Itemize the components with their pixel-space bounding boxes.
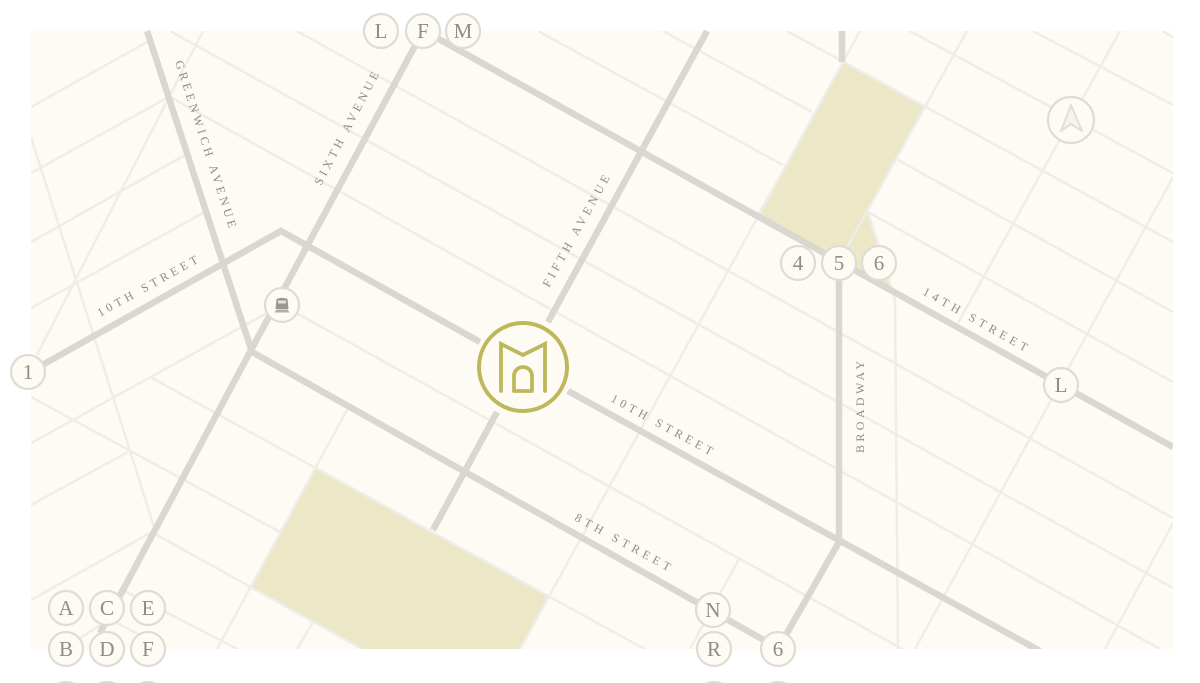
subway badge 5: 5 bbox=[834, 251, 844, 275]
street label: 10th Street west: 10TH STREET bbox=[95, 252, 201, 320]
subway badge C bbox=[90, 591, 124, 625]
subway badge 4: 4 bbox=[793, 251, 804, 275]
subway badge E bbox=[131, 591, 165, 625]
subway badge L east: L bbox=[1055, 373, 1067, 397]
subway badge M: M bbox=[454, 19, 473, 43]
subway badge 1: 1 bbox=[23, 360, 33, 384]
subway badge F: F bbox=[417, 19, 429, 43]
icon: north arrow bbox=[1048, 97, 1094, 143]
street label: 14th Street: 14TH STREET bbox=[921, 284, 1031, 355]
parks bbox=[250, 62, 925, 649]
subway badge 1 bbox=[11, 355, 45, 389]
subway badge N: N bbox=[705, 598, 721, 622]
street label: 10th Street east: 10TH STREET bbox=[609, 391, 716, 458]
subway badge 4 bbox=[781, 246, 815, 280]
subway badge L: L bbox=[375, 19, 387, 43]
street label: Fifth Avenue: FIFTH AVENUE bbox=[539, 172, 613, 289]
subway badge 5 bbox=[822, 246, 856, 280]
subway badge N bbox=[696, 593, 730, 627]
subway badge 6 south bbox=[761, 632, 795, 666]
subway badge C: C bbox=[100, 596, 114, 620]
subway badge 6 south: 6 bbox=[773, 637, 783, 661]
subway badge R: R bbox=[707, 637, 721, 661]
subway badge 6: 6 bbox=[874, 251, 884, 275]
street label: Broadway: BROADWAY bbox=[853, 361, 867, 453]
subway badge L bbox=[364, 14, 398, 48]
subway badge M bbox=[446, 14, 480, 48]
subway badge R bbox=[697, 632, 731, 666]
subway badge A: A bbox=[58, 596, 74, 620]
street label: Greenwich Avenue: GREENWICH AVENUE bbox=[172, 59, 240, 229]
subway badge F south: F bbox=[142, 637, 154, 661]
logo: M monogram bbox=[479, 323, 567, 411]
subway badge B bbox=[49, 632, 83, 666]
subway badge A bbox=[49, 591, 83, 625]
subway badge L east bbox=[1044, 368, 1078, 402]
icon: train station bbox=[265, 288, 299, 322]
subway badge B: B bbox=[59, 637, 73, 661]
subway badge E: E bbox=[142, 596, 154, 620]
subway badge F bbox=[406, 14, 440, 48]
subway badge D: D bbox=[99, 637, 115, 661]
street label: 8th Street: 8TH STREET bbox=[573, 510, 674, 574]
street label: Sixth Avenue: SIXTH AVENUE bbox=[311, 69, 382, 187]
cut-off badges along the bottom edge bbox=[49, 682, 795, 683]
subway badge F south bbox=[131, 632, 165, 666]
subway badge D bbox=[90, 632, 124, 666]
subway badge 6 bbox=[862, 246, 896, 280]
